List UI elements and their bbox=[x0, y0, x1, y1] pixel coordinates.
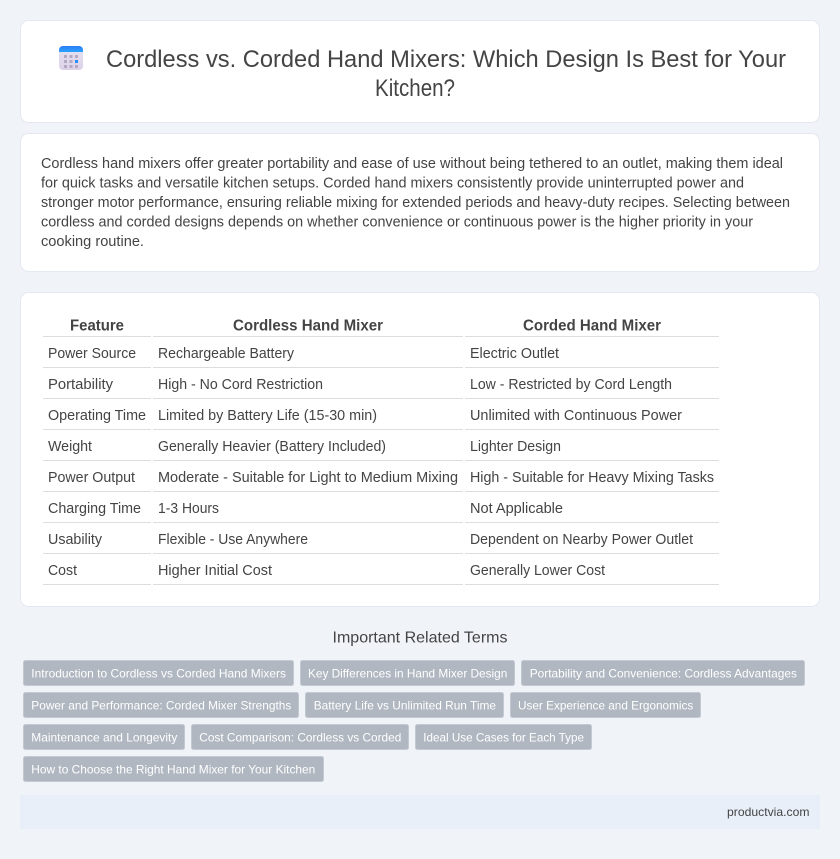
tag: ideal use cases: Ideal Use Cases for Each Type bbox=[423, 730, 584, 744]
row: usability bbox=[48, 532, 693, 548]
title text: Kitchen? bbox=[375, 75, 455, 102]
intro text bbox=[41, 156, 790, 250]
row: cost: Higher Initial Cost bbox=[158, 563, 272, 579]
row: power output: Power Output bbox=[48, 470, 135, 486]
table header: Feature bbox=[70, 318, 124, 334]
related terms tags bbox=[24, 660, 804, 782]
tag: portability bbox=[522, 660, 804, 686]
row: operating time bbox=[48, 408, 682, 424]
title text bbox=[106, 46, 786, 102]
title card bbox=[20, 20, 820, 122]
row: power output: High - Suitable for Heavy Mixing Tasks bbox=[470, 470, 714, 486]
tag: key differences bbox=[300, 660, 514, 686]
tag: how to choose bbox=[24, 756, 324, 782]
tag: maintenance bbox=[24, 724, 184, 750]
tag: user experience bbox=[510, 692, 700, 718]
row: operating time: Limited by Battery Life (15-30 min) bbox=[158, 408, 377, 424]
row: power output: Moderate - Suitable for Light to Medium Mixing bbox=[158, 470, 458, 486]
comparison table card bbox=[20, 292, 820, 606]
row: usability: Usability bbox=[48, 532, 103, 548]
tag: introduction: Introduction to Cordless vs Corded Hand Mixers bbox=[31, 666, 286, 680]
table header: Corded Hand Mixer bbox=[523, 318, 661, 334]
tag: how to choose: How to Choose the Right Hand Mixer for Your Kitchen bbox=[31, 762, 315, 776]
tag: portability: Portability and Convenience: Cordless Advantages bbox=[530, 666, 797, 680]
tag: battery life bbox=[306, 692, 504, 718]
row: charging time: Charging Time bbox=[48, 501, 141, 517]
table header: Cordless Hand Mixer bbox=[233, 318, 383, 334]
tag: maintenance: Maintenance and Longevity bbox=[31, 730, 177, 744]
intro text: for quick tasks and versatile kitchen setups. Corded hand mixers consistently provide uninterrupted power and bbox=[41, 176, 744, 192]
table header bbox=[70, 318, 661, 334]
tag: user experience: User Experience and Ergonomics bbox=[518, 698, 693, 712]
row: charging time: Not Applicable bbox=[470, 501, 563, 517]
intro text: Cordless hand mixers offer greater portability and ease of use without being tethered to an outlet, making them ideal bbox=[41, 156, 783, 172]
row: power source: Electric Outlet bbox=[470, 346, 559, 362]
row: weight: Generally Heavier (Battery Included) bbox=[158, 439, 386, 455]
row: weight: Lighter Design bbox=[470, 439, 561, 455]
tag: ideal use cases bbox=[416, 724, 592, 750]
related terms heading: Important Related Terms bbox=[332, 630, 508, 646]
row: charging time bbox=[48, 501, 563, 517]
tag: cost comparison bbox=[192, 724, 408, 750]
row: portability: Portability bbox=[48, 377, 114, 393]
row: operating time: Operating Time bbox=[48, 408, 146, 424]
intro text: stronger motor performance, ensuring reliable mixing for extended periods and heavy-duty recipes. Selecting between bbox=[41, 195, 790, 211]
row: power source: Power Source bbox=[48, 346, 136, 362]
row: power source bbox=[48, 346, 559, 362]
icon: calendar bbox=[59, 46, 83, 70]
row: operating time: Unlimited with Continuous Power bbox=[470, 408, 682, 424]
tag: battery life: Battery Life vs Unlimited Run Time bbox=[314, 698, 496, 712]
intro text: cooking routine. bbox=[41, 234, 144, 250]
intro text: cordless and corded designs depends on whether convenience or continuous power is the higher priority in your bbox=[41, 214, 753, 230]
row: charging time: 1-3 Hours bbox=[158, 501, 219, 517]
intro paragraph card bbox=[20, 134, 820, 272]
table row lines bbox=[43, 336, 719, 585]
row: power source: Rechargeable Battery bbox=[158, 346, 295, 362]
row: cost: Generally Lower Cost bbox=[470, 563, 605, 579]
tag: power and performance bbox=[24, 692, 298, 718]
row: usability: Dependent on Nearby Power Outlet bbox=[470, 532, 693, 548]
row: portability: Low - Restricted by Cord Length bbox=[470, 377, 672, 393]
tag: key differences: Key Differences in Hand Mixer Design bbox=[308, 666, 507, 680]
title text: Cordless vs. Corded Hand Mixers: Which Design Is Best for Your bbox=[106, 46, 786, 73]
row: usability: Flexible - Use Anywhere bbox=[158, 532, 308, 548]
footer source: productvia.com bbox=[727, 805, 810, 819]
tag: power and performance: Power and Performance: Corded Mixer Strengths bbox=[31, 698, 291, 712]
row: portability bbox=[48, 377, 672, 393]
row: power output bbox=[48, 470, 714, 486]
footer bbox=[20, 795, 820, 829]
tag: introduction bbox=[24, 660, 294, 686]
row: weight: Weight bbox=[48, 439, 92, 455]
row: cost bbox=[48, 563, 605, 579]
tag: cost comparison: Cost Comparison: Cordless vs Corded bbox=[199, 730, 401, 744]
row: cost: Cost bbox=[48, 563, 77, 579]
row: weight bbox=[48, 439, 561, 455]
row: portability: High - No Cord Restriction bbox=[158, 377, 323, 393]
